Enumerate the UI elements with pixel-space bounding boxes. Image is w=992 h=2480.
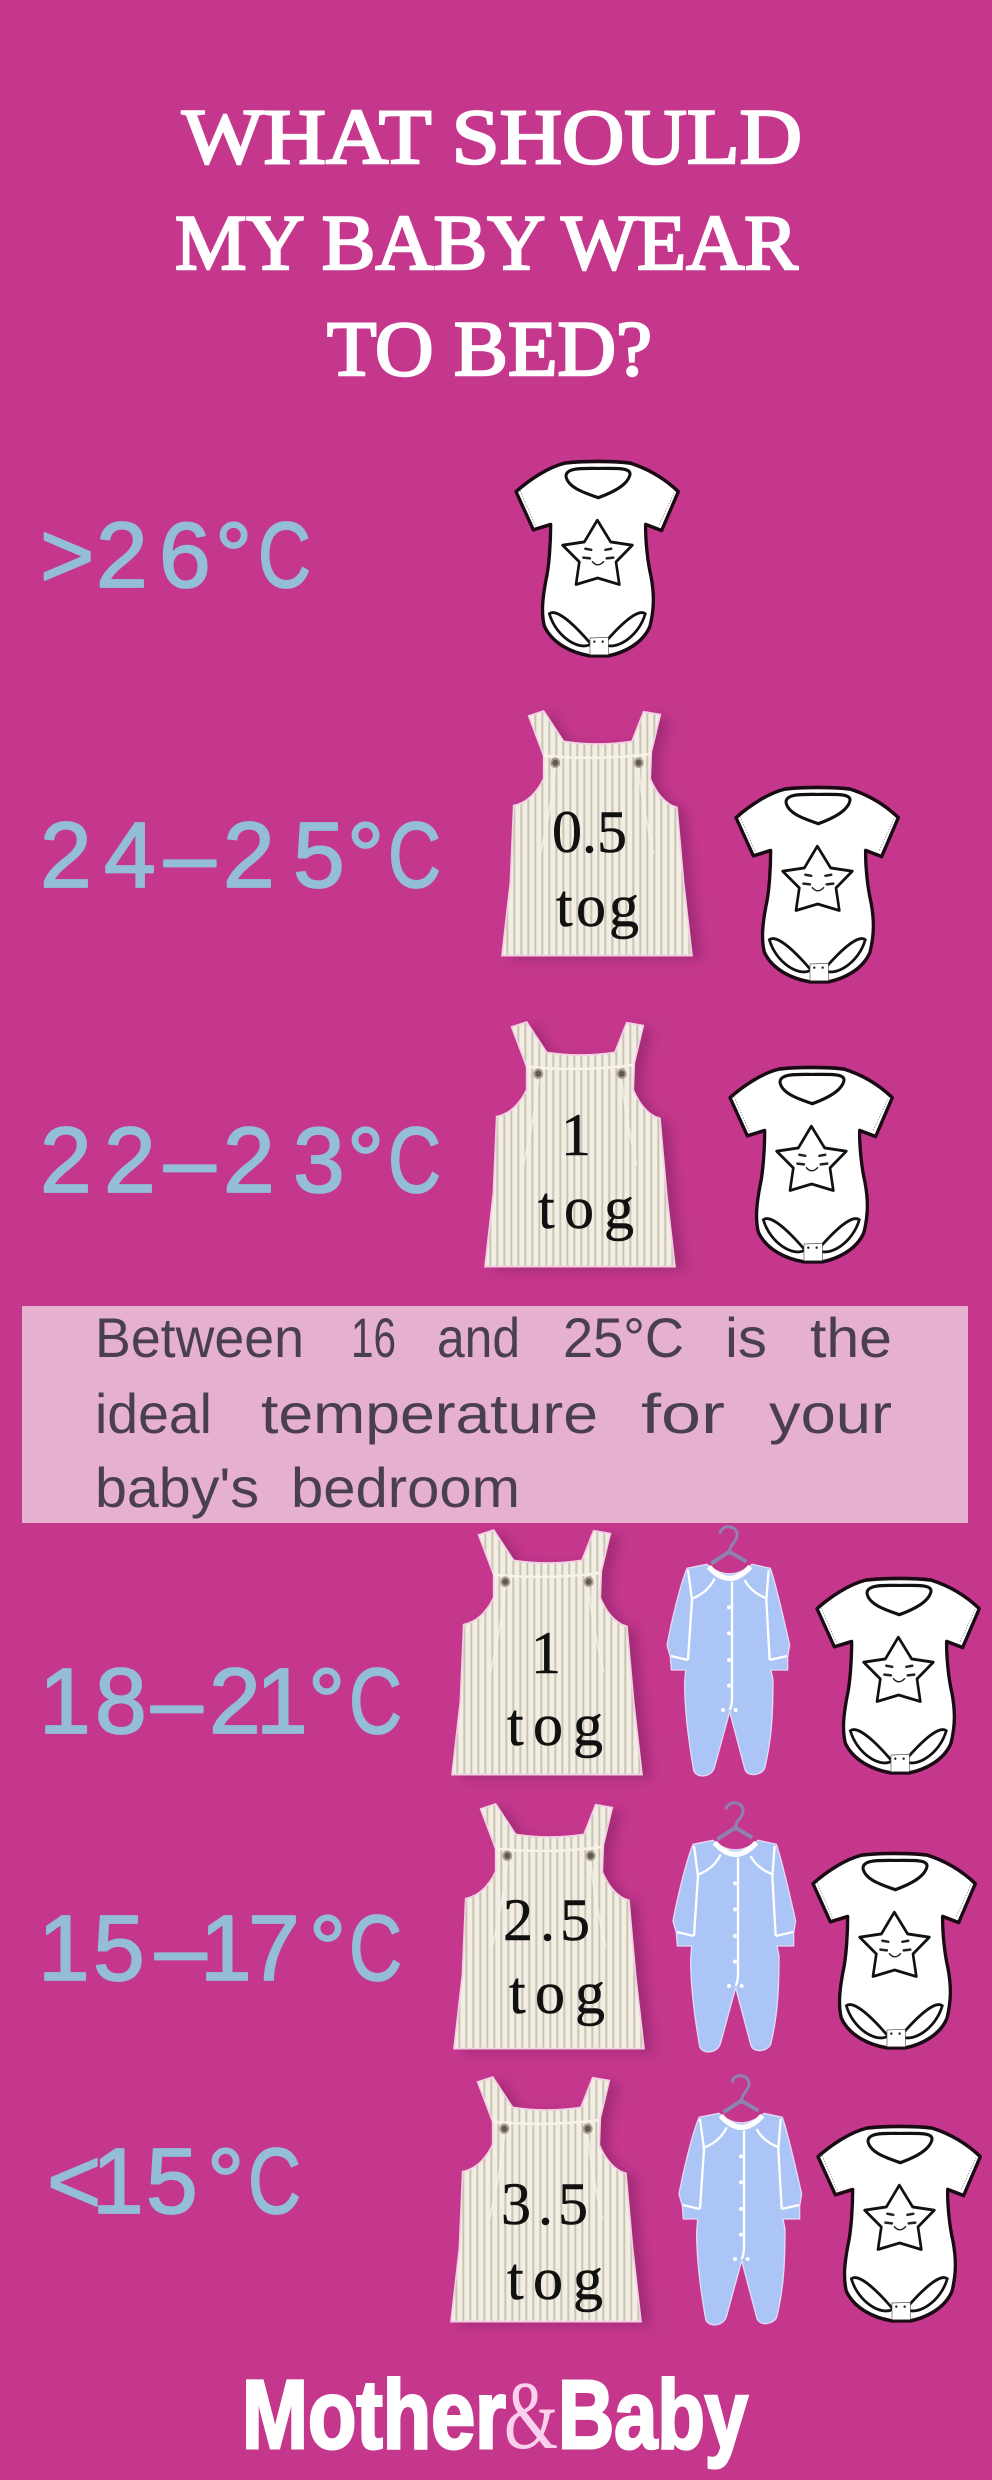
logo: Mother & Baby: & <box>504 2362 558 2470</box>
icon: 0.5 tog sleeping bag: 0.5 <box>552 799 627 865</box>
temperature label: C <box>349 1896 402 2000</box>
callout: ideal temperature: ideal <box>95 1382 212 1445</box>
icon: 1 tog sleeping bag: tog <box>507 1692 603 1758</box>
callout: ideal temperature: bedroom <box>291 1456 520 1519</box>
title <box>175 93 802 392</box>
temperature label: >26° <box>40 503 252 607</box>
callout: ideal temperature: and <box>437 1306 520 1369</box>
icon: 1 tog sleeping bag <box>485 1022 684 1270</box>
callout: ideal temperature: the <box>810 1306 892 1369</box>
icon: 3.5 tog sleeping bag: 3.5 <box>501 2171 588 2237</box>
icon: 1 tog sleeping bag <box>452 1530 651 1778</box>
icon: 1 tog sleeping bag: 1 <box>531 1620 561 1686</box>
icon: 0.5 tog sleeping bag: tog <box>556 873 639 939</box>
temperature label: 24–25° <box>40 803 384 907</box>
callout: ideal temperature: 25°C <box>563 1306 684 1369</box>
icon: 2.5 tog sleeping bag <box>454 1804 653 2052</box>
title: MY BABY WEAR <box>175 199 798 286</box>
icon: 1 tog sleeping bag: 1 <box>561 1102 591 1168</box>
temperature label: C <box>248 2129 301 2233</box>
icon: 2.5 tog sleeping bag: tog <box>509 1960 605 2026</box>
temperature label: 15–17° <box>38 1896 346 2000</box>
temperature label: C <box>258 503 311 607</box>
row: 18-21 degrees <box>39 1527 979 1778</box>
temperature label: C <box>388 803 441 907</box>
icon: 3.5 tog sleeping bag: tog <box>507 2246 603 2312</box>
icon: 2.5 tog sleeping bag: 2.5 <box>503 1887 590 1953</box>
icon: bodysuit <box>516 461 678 656</box>
title: TO BED? <box>327 305 652 392</box>
callout: ideal temperature: your <box>769 1382 892 1445</box>
temperature label: C <box>349 1649 402 1753</box>
callout: ideal temperature: Between <box>95 1306 304 1369</box>
callout: ideal temperature: is <box>725 1306 767 1369</box>
row: above 26 degrees <box>40 461 678 656</box>
callout: ideal temperature <box>22 1306 968 1523</box>
title: WHAT SHOULD <box>182 93 802 180</box>
row: 15-17 degrees <box>38 1803 975 2052</box>
icon: bodysuit <box>730 1067 892 1262</box>
callout: ideal temperature: baby's <box>95 1456 259 1519</box>
icon: bodysuit <box>813 1853 975 2048</box>
row: 22-23 degrees <box>40 1022 892 1270</box>
row: below 15 degrees <box>47 2076 980 2325</box>
temperature label: 18–21° <box>39 1649 345 1753</box>
callout: ideal temperature: 16 <box>351 1306 396 1369</box>
callout: ideal temperature: for <box>641 1382 725 1445</box>
logo: Mother & Baby: Baby <box>558 2360 748 2469</box>
icon: sleepsuit on hanger <box>673 1803 796 2052</box>
callout: ideal temperature: temperature <box>261 1382 598 1445</box>
icon: 0.5 tog sleeping bag <box>502 711 701 959</box>
icon: sleepsuit on hanger <box>679 2076 802 2325</box>
icon: bodysuit <box>736 787 898 982</box>
temperature label: <15° <box>47 2129 244 2233</box>
icon: 3.5 tog sleeping bag <box>451 2077 650 2325</box>
logo: Mother & Baby: Mother <box>242 2360 506 2469</box>
icon: bodysuit <box>818 2126 980 2321</box>
icon: sleepsuit on hanger <box>667 1527 790 1776</box>
temperature label: C <box>388 1108 441 1212</box>
logo: Mother & Baby <box>242 2360 748 2470</box>
icon: bodysuit <box>817 1578 979 1773</box>
icon: 1 tog sleeping bag: tog <box>538 1175 634 1241</box>
row: 24-25 degrees <box>40 711 898 982</box>
temperature label: 22–23° <box>40 1108 384 1212</box>
